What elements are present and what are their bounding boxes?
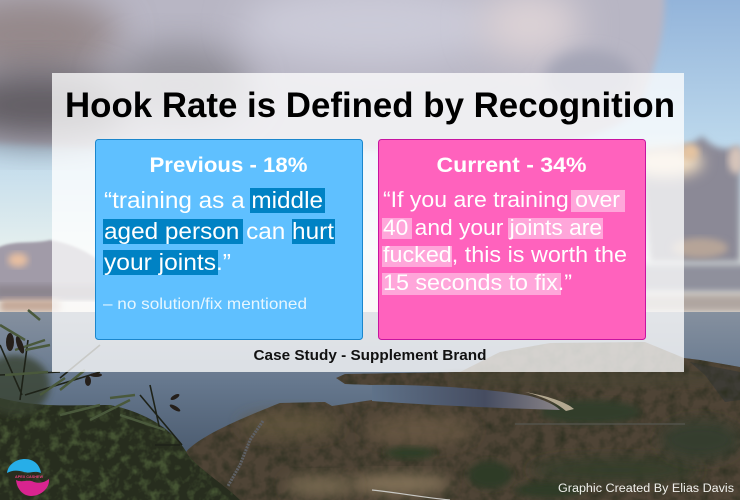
- current quote: “If you are training over: [383, 187, 621, 212]
- previous quote: your joints.”: [104, 249, 231, 275]
- case study caption: Case Study - Supplement Brand: [254, 348, 486, 364]
- current quote: 15 seconds to fix.”: [383, 270, 572, 295]
- lower left clouds: [0, 240, 130, 300]
- town: [690, 362, 740, 402]
- title: Hook Rate is Defined by Recognition: [65, 85, 675, 125]
- land: [186, 342, 740, 500]
- right clouds: [640, 136, 740, 262]
- translucent white panel: [52, 73, 684, 372]
- current quote: 40 and your joints are: [383, 215, 602, 240]
- previous heading: Previous - 18%: [150, 153, 308, 177]
- panel: current: [378, 140, 646, 340]
- previous quote: [104, 187, 334, 275]
- panel: previous: [96, 140, 362, 340]
- logo wordmark: APEX CASHEW: [15, 475, 43, 479]
- previous quote: “training as a middle: [104, 187, 323, 213]
- foliage: [0, 398, 240, 500]
- current quote highlights: [382, 190, 625, 295]
- previous note: – no solution/fix mentioned: [103, 296, 307, 313]
- icon: logo: [7, 459, 49, 496]
- credit: Graphic Created By Elias Davis: [558, 483, 734, 495]
- current heading: Current - 34%: [436, 153, 586, 177]
- road: [228, 421, 263, 486]
- current quote: [383, 187, 627, 295]
- current quote: fucked, this is worth the: [383, 242, 627, 267]
- previous quote: aged person can hurt: [104, 218, 334, 244]
- previous quote highlights: [103, 188, 335, 275]
- bay: [372, 385, 560, 410]
- sea: [0, 312, 740, 452]
- upper cloud: [0, 0, 665, 150]
